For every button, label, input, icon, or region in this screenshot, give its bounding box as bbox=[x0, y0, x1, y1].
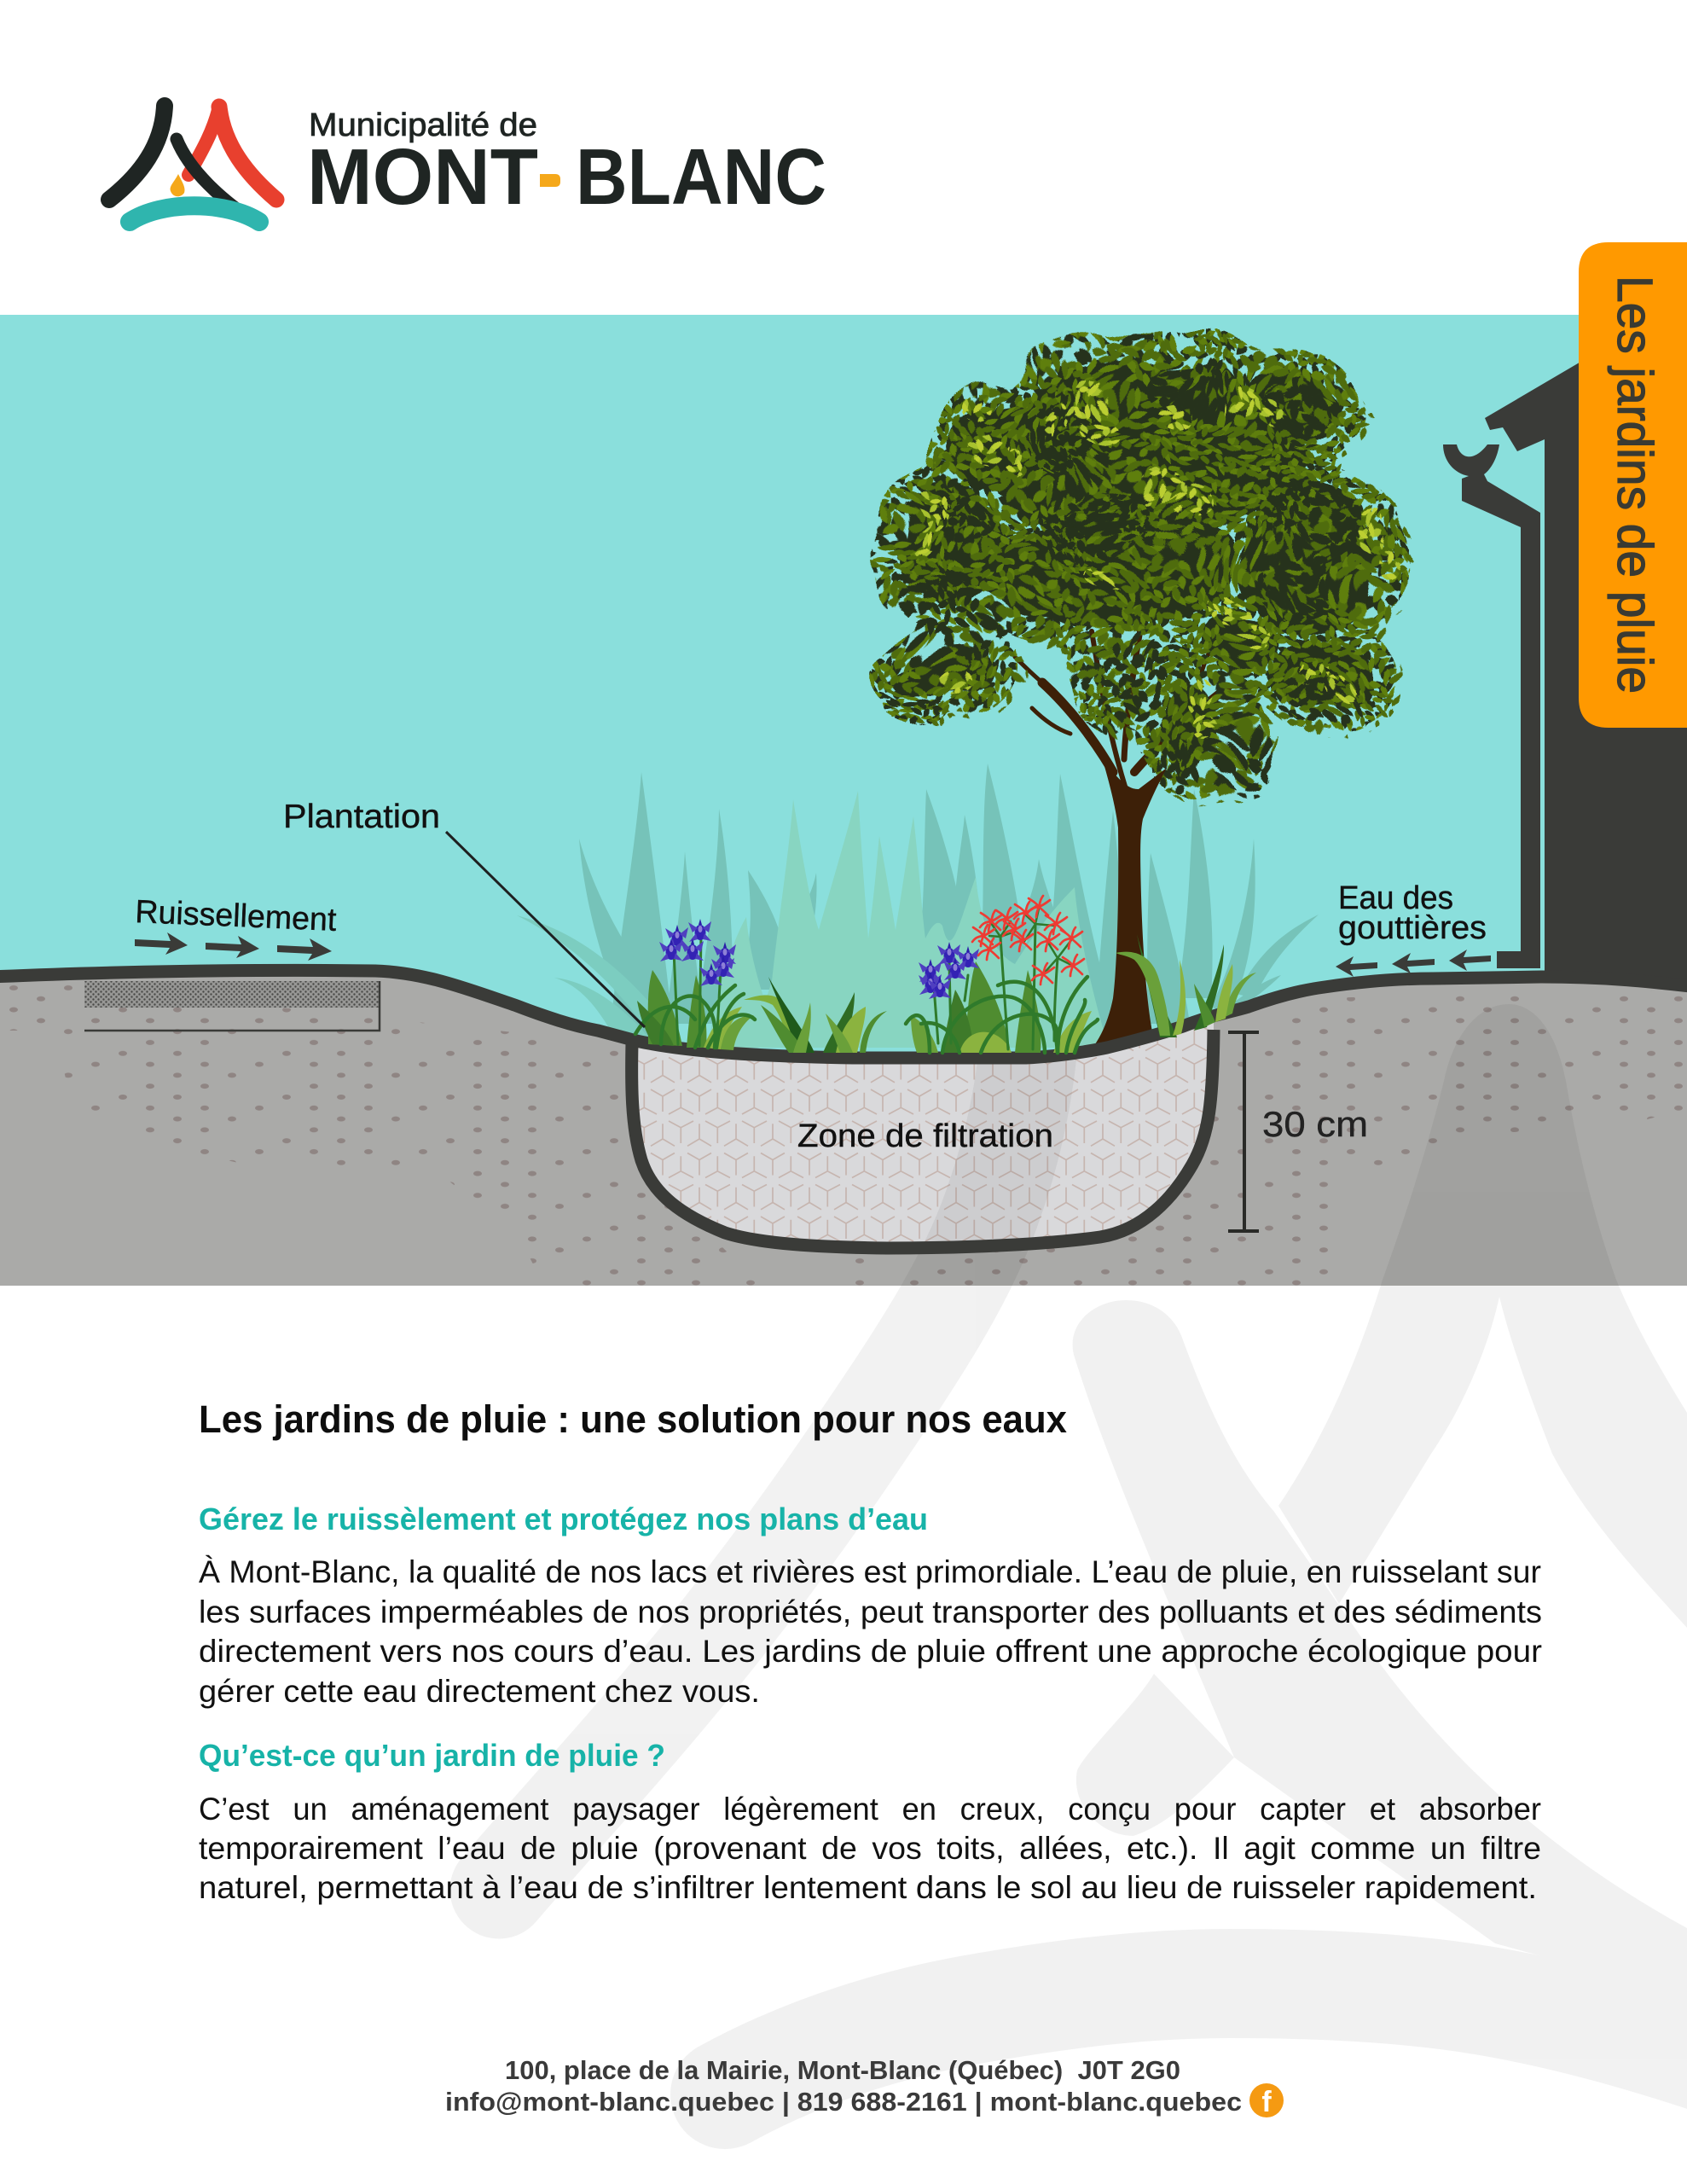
label: Plantation: Plantation bbox=[283, 799, 440, 835]
mixed flower plant bbox=[906, 896, 1098, 1053]
plant right of trunk bbox=[1116, 934, 1256, 1037]
tree bbox=[872, 327, 1415, 1044]
paragraph: intro: les surfaces imperméables de nos propriétés, peut transporter des polluants et des sédiments bbox=[199, 1594, 1542, 1629]
iris flowers left bbox=[659, 919, 736, 986]
side tab title: Les jardins de pluie bbox=[1607, 276, 1662, 694]
ground soil bbox=[0, 970, 1687, 1286]
gutter water arrows bbox=[1336, 950, 1491, 977]
basin outline bbox=[632, 1030, 1214, 1248]
background logo watermark bbox=[499, 1004, 1687, 2094]
label: Zone de filtration: Zone de filtration bbox=[797, 1118, 1053, 1154]
logo wordmark small: Municipalité de bbox=[309, 107, 537, 143]
blue iris flowers bbox=[919, 942, 979, 999]
soil dots right bbox=[853, 990, 1687, 1286]
label: Ruissellement: Ruissellement bbox=[135, 894, 338, 938]
callout line: plantation bbox=[446, 832, 645, 1027]
tree branches bbox=[1015, 614, 1228, 789]
paragraph: definition: temporairement l’eau de pluie (provenant de vos toits, allées, etc.). Il agit comme un filtre bbox=[199, 1831, 1541, 1866]
logo wordmark MONT: MONT bbox=[307, 132, 538, 221]
tree foliage bbox=[872, 327, 1415, 801]
heading: definition: Qu’est-ce qu’un jardin de pluie ? bbox=[199, 1738, 665, 1773]
heading: ruissellement: Gérez le ruissèlement et protégez nos plans d’eau bbox=[199, 1502, 928, 1536]
logo bbox=[109, 106, 826, 224]
grass plant centre bbox=[744, 977, 887, 1053]
illustration: sky background bbox=[0, 315, 1687, 1286]
dimension bracket bbox=[1228, 1032, 1259, 1231]
runoff arrows bbox=[135, 932, 332, 961]
background blades of plants bbox=[517, 764, 1319, 1048]
logo wordmark BLANC: BLANC bbox=[576, 132, 826, 221]
paragraph: definition: C’est un aménagement paysager légèrement en creux, conçu pour capter et absorber bbox=[199, 1792, 1541, 1827]
foreground plants bbox=[635, 896, 1256, 1053]
label: Eau des gouttieres: gouttières bbox=[1338, 910, 1487, 946]
icon: facebook bbox=[1249, 2083, 1284, 2118]
footer address: 100, place de la Mairie, Mont-Blanc (Québec) J0T 2G0 bbox=[505, 2055, 1180, 2085]
house wall and roof bbox=[1485, 290, 1687, 990]
paragraph: intro: gérer cette eau directement chez vous. bbox=[199, 1674, 760, 1709]
side tab bbox=[1579, 242, 1687, 728]
footer contacts: info@mont-blanc.quebec | 819 688-2161 | mont-blanc.quebec bbox=[445, 2087, 1242, 2117]
icon: facebook: f bbox=[1261, 2086, 1272, 2118]
main title: Les jardins de pluie : une solution pour nos eaux bbox=[199, 1397, 1067, 1441]
filtration basin fill bbox=[632, 1015, 1214, 1248]
ground surface line bbox=[0, 970, 1687, 1058]
label: Eau des gouttieres: Eau des bbox=[1338, 880, 1453, 916]
paragraph: intro: directement vers nos cours d’eau. Les jardins de pluie offrent une approche écologique pour bbox=[199, 1634, 1542, 1669]
iris plant left bbox=[635, 919, 755, 1050]
paragraph: definition: naturel, permettant à l’eau de s’infiltrer lentement dans le sol au lieu de ruisseler rapidement. bbox=[199, 1870, 1537, 1905]
logo orange drop bbox=[171, 174, 185, 196]
paragraph: intro: À Mont-Blanc, la qualité de nos lacs et rivières est primordiale. L’eau de pluie, en ruisselant sur bbox=[199, 1554, 1541, 1589]
gutter and downspout bbox=[1443, 444, 1540, 968]
road base dotted layer bbox=[84, 981, 380, 1031]
soil dots left bbox=[0, 978, 762, 1286]
red flowers bbox=[972, 896, 1084, 985]
logo mark bbox=[109, 106, 276, 224]
logo dash bbox=[540, 174, 560, 187]
tree trunk bbox=[1095, 758, 1167, 1044]
label: 30 cm: 30 cm bbox=[1262, 1104, 1368, 1144]
